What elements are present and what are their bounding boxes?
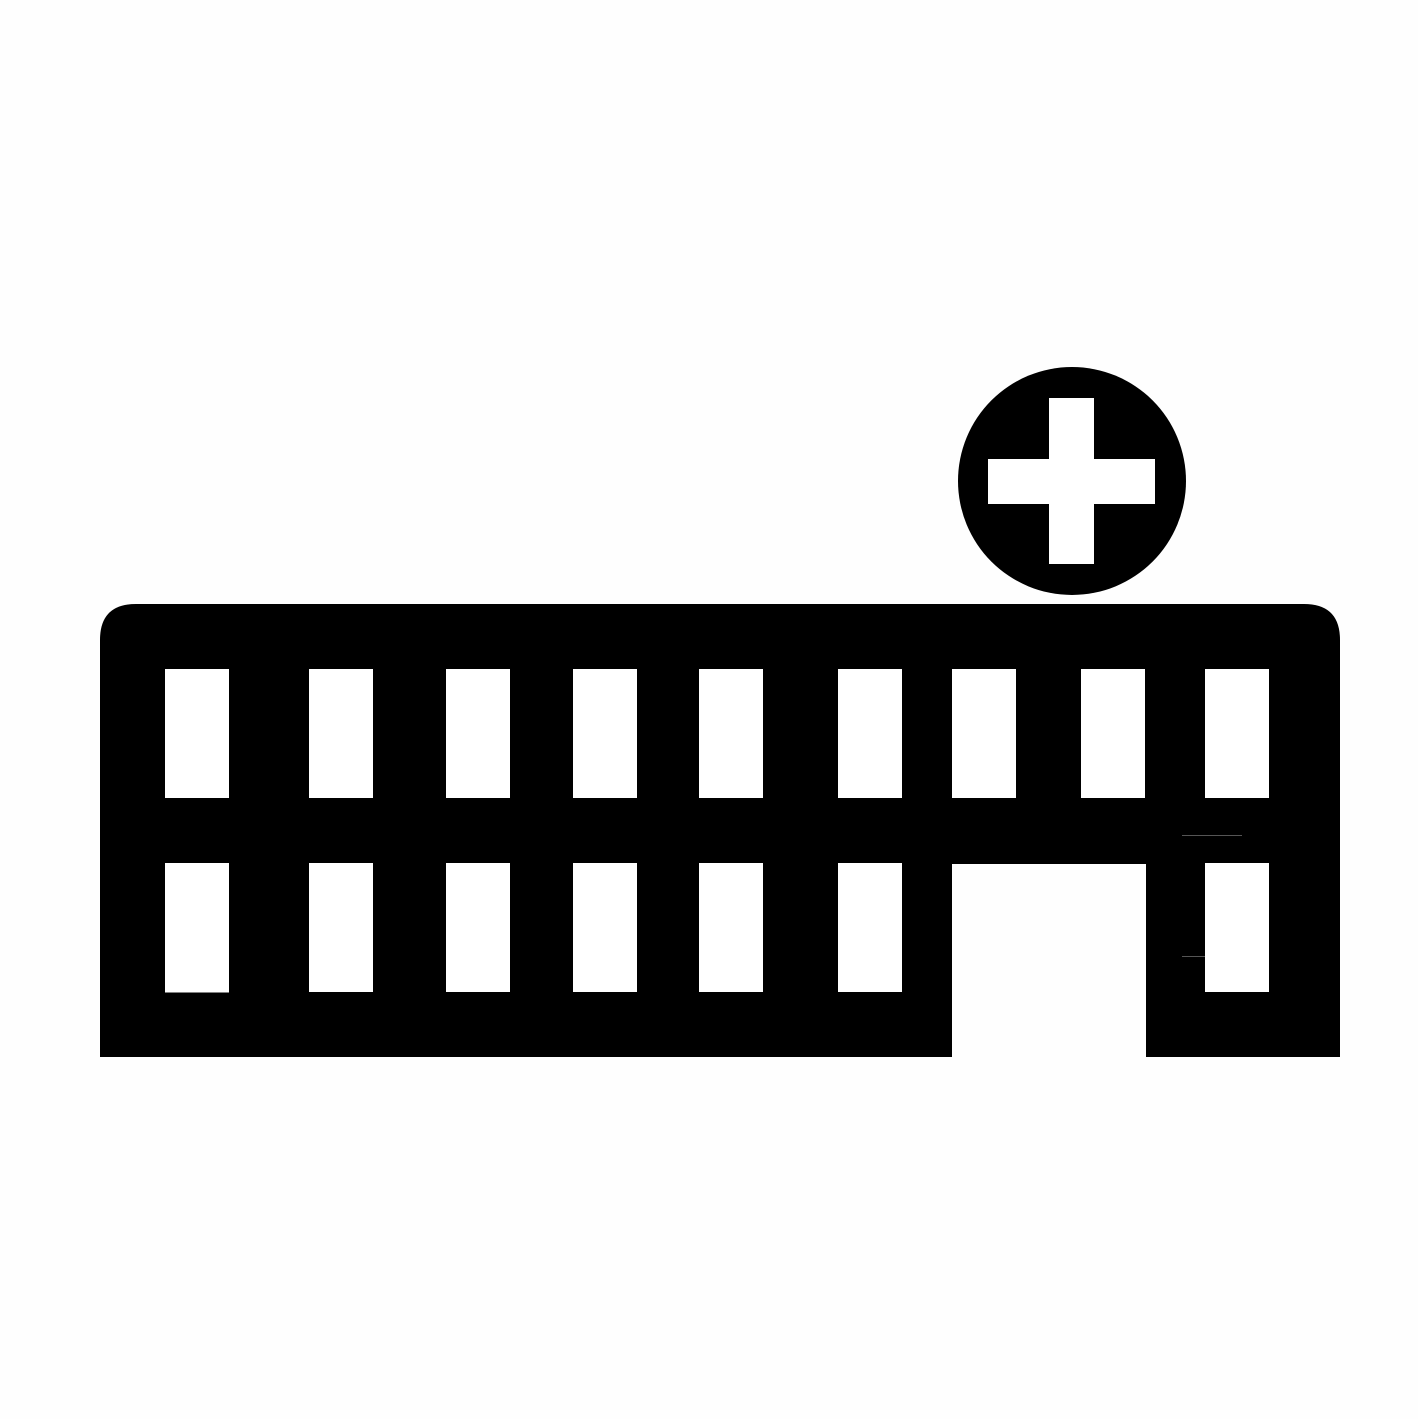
medical cross badge bbox=[958, 367, 1186, 595]
hairline artifacts on right wing bbox=[1182, 835, 1242, 957]
lower row of windows bbox=[165, 863, 1269, 992]
building body bbox=[100, 604, 1340, 1057]
upper row of windows bbox=[165, 669, 1269, 798]
